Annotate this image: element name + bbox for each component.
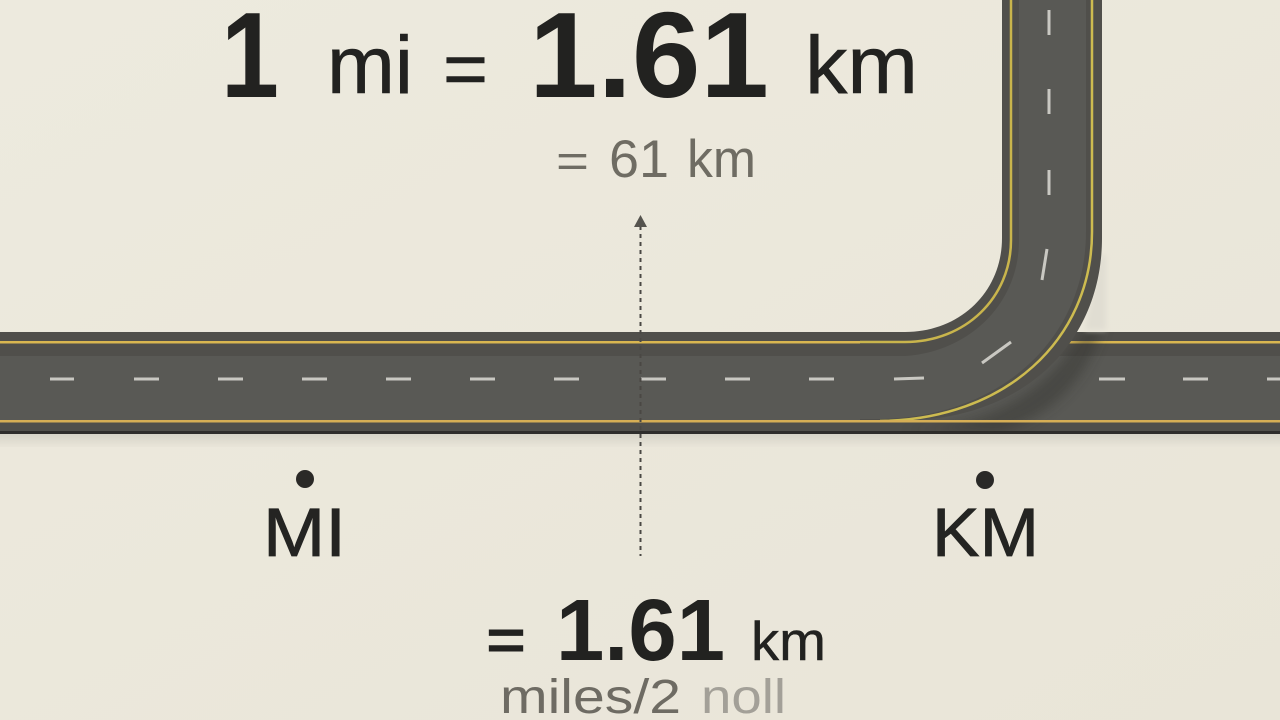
marker: KM: KM xyxy=(932,494,1039,571)
footnote: miles/2 noll xyxy=(500,671,786,720)
title equation: 1 mi = 1.61 km: km xyxy=(805,20,918,111)
dotted arrow xyxy=(634,215,647,556)
centre dashes xyxy=(50,378,1280,380)
road illustration xyxy=(0,0,1280,447)
marker: MI: MI xyxy=(263,494,346,571)
result equation: = 1.61 km: km xyxy=(751,610,826,672)
secondary equation: = 61 km: = xyxy=(556,135,589,187)
result equation: = 1.61 km: = xyxy=(486,608,526,673)
curved road xyxy=(860,0,1102,421)
curve shadow on road xyxy=(964,332,1104,431)
title equation: 1 mi = 1.61 km: mi xyxy=(327,20,413,111)
road shadow xyxy=(0,434,1280,447)
horizontal road xyxy=(0,332,1280,434)
secondary equation: = 61 km xyxy=(556,130,756,189)
lower yellow edge line xyxy=(0,420,1280,422)
result equation: = 1.61 km xyxy=(486,582,826,679)
title equation: 1 mi = 1.61 km: = xyxy=(443,27,488,112)
title equation: 1 mi = 1.61 km xyxy=(221,0,918,123)
secondary equation: = 61 km: km xyxy=(687,130,756,189)
result equation: = 1.61 km: 1.61 xyxy=(556,582,725,679)
secondary equation: = 61 km: 61 xyxy=(609,130,669,189)
faint shadow beside curve xyxy=(1085,255,1106,330)
